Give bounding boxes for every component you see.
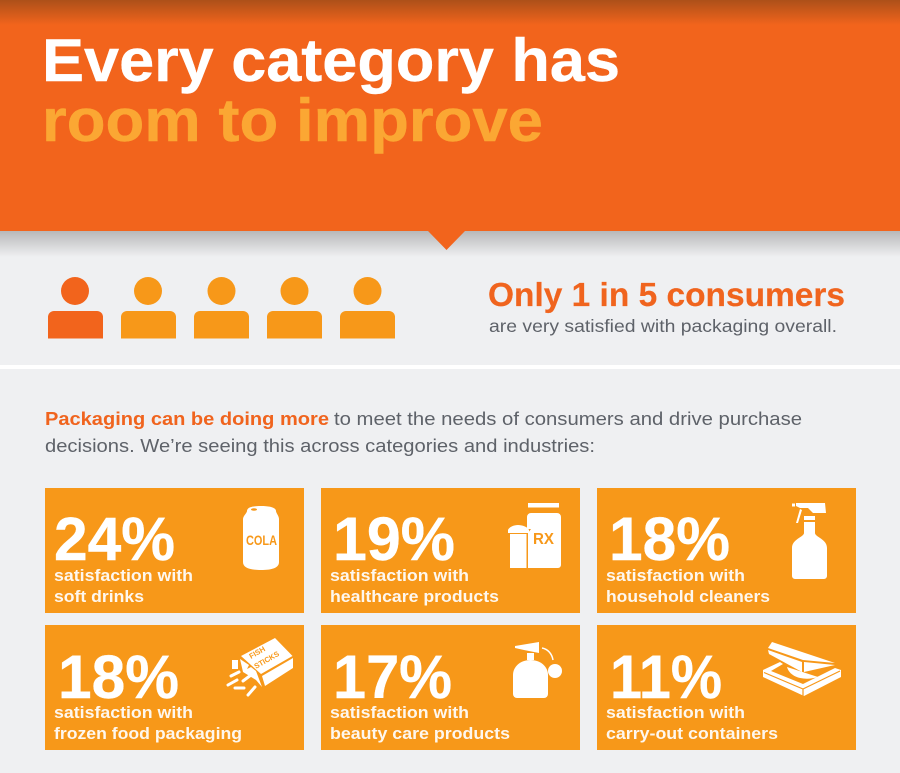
- card: soft drinks: soft drinks: [54, 587, 144, 606]
- intro text: to meet the needs of consumers and drive purchase: [334, 408, 802, 429]
- card: beauty care: satisfaction with: [330, 703, 469, 722]
- card: beauty care: [321, 625, 580, 750]
- card: frozen food: 18%: [58, 643, 179, 711]
- card: healthcare: 19%: [333, 505, 455, 573]
- icon: perfume atomizer: [513, 642, 562, 698]
- callout: only 1 in 5: are very satisfied with packaging overall.: [489, 316, 837, 336]
- card: soft drinks: 24%: [54, 505, 175, 573]
- card: household cleaners: household cleaners: [606, 587, 770, 606]
- callout: only 1 in 5: [488, 276, 845, 336]
- icon: fish sticks box: STICKS: [252, 649, 281, 671]
- intro text: decisions. We’re seeing this across categories and industries:: [45, 435, 595, 456]
- icon: fish sticks box: FISH: [248, 644, 267, 661]
- card: beauty care: beauty care products: [330, 724, 510, 743]
- icon: rx bottles: [508, 503, 561, 568]
- icon: spray bottle: [792, 503, 827, 579]
- title: [42, 27, 620, 154]
- card: frozen food: frozen food packaging: [54, 724, 242, 743]
- card: household cleaners: 18%: [609, 505, 730, 573]
- card: carry-out containers: satisfaction with: [606, 703, 745, 722]
- card: soft drinks: [45, 488, 304, 613]
- header banner: [0, 0, 900, 257]
- card: carry-out containers: [597, 625, 856, 750]
- card: healthcare: satisfaction with: [330, 566, 469, 585]
- icon: fish sticks box: [228, 638, 293, 695]
- card: carry-out containers: carry-out containers: [606, 724, 778, 743]
- people icons: 1 in 5: [48, 277, 395, 338]
- title: Every category has: [42, 27, 620, 94]
- title: room to improve: [42, 87, 543, 154]
- card: frozen food: satisfaction with: [54, 703, 193, 722]
- card: healthcare: healthcare products: [330, 587, 499, 606]
- icon: rx bottles: RX: [533, 531, 555, 548]
- card: soft drinks: satisfaction with: [54, 566, 193, 585]
- callout: only 1 in 5: Only 1 in 5 consumers: [488, 276, 845, 313]
- card: household cleaners: satisfaction with: [606, 566, 745, 585]
- card: healthcare: [321, 488, 580, 613]
- card: carry-out containers: 11%: [610, 643, 722, 711]
- intro text: [45, 408, 802, 456]
- intro text: Packaging can be doing more: [45, 408, 329, 429]
- icon: cola can: [243, 506, 279, 570]
- icon: cola can: COLA: [246, 532, 277, 548]
- card: beauty care: 17%: [333, 643, 452, 711]
- card: household cleaners: [597, 488, 856, 613]
- card: frozen food: [45, 625, 304, 750]
- icon: pizza box: [763, 642, 841, 696]
